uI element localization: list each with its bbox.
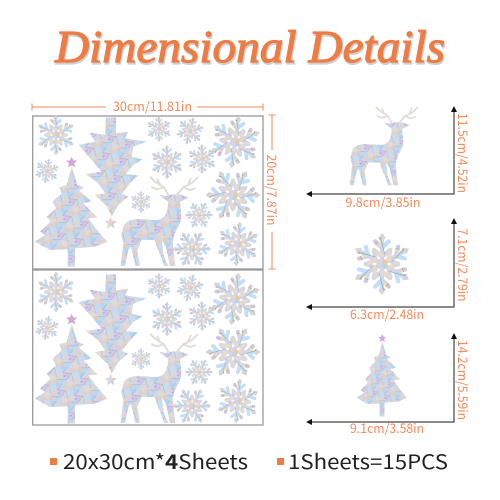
panel: sticker sheet 2 [32,269,270,432]
spec: pieces per sheet: 1Sheets=15PCS [288,446,448,475]
snowflake sticker with dimensions: 7.1cm/2.79in [454,228,473,302]
height dimension: sheet: 20cm/7.87in [263,154,282,226]
snowflake sticker with dimensions: 6.3cm/2.48in [350,304,424,323]
deer sticker with dimensions [306,106,473,211]
deer sticker with dimensions: 11.5cm/4.52in [454,113,473,193]
tree sticker with dimensions [306,333,473,437]
height dimension: sheet [263,115,282,269]
width dimension: sheet [32,96,263,115]
snowflake sticker with dimensions [306,218,473,323]
width dimension: sheet: 30cm/11.81in [113,96,192,115]
spec: sheet count: 20x30cm* 4Sheets [63,446,248,475]
title: Dimensional Details [55,23,446,74]
panel: sticker sheet 1 [32,112,270,275]
tree sticker with dimensions: 14.2cm/5.59in [454,340,473,420]
tree sticker with dimensions: 9.1cm/3.58in [350,418,424,437]
title: Dimensional Details [54,21,445,72]
deer sticker with dimensions: 9.8cm/3.85in [346,192,420,211]
